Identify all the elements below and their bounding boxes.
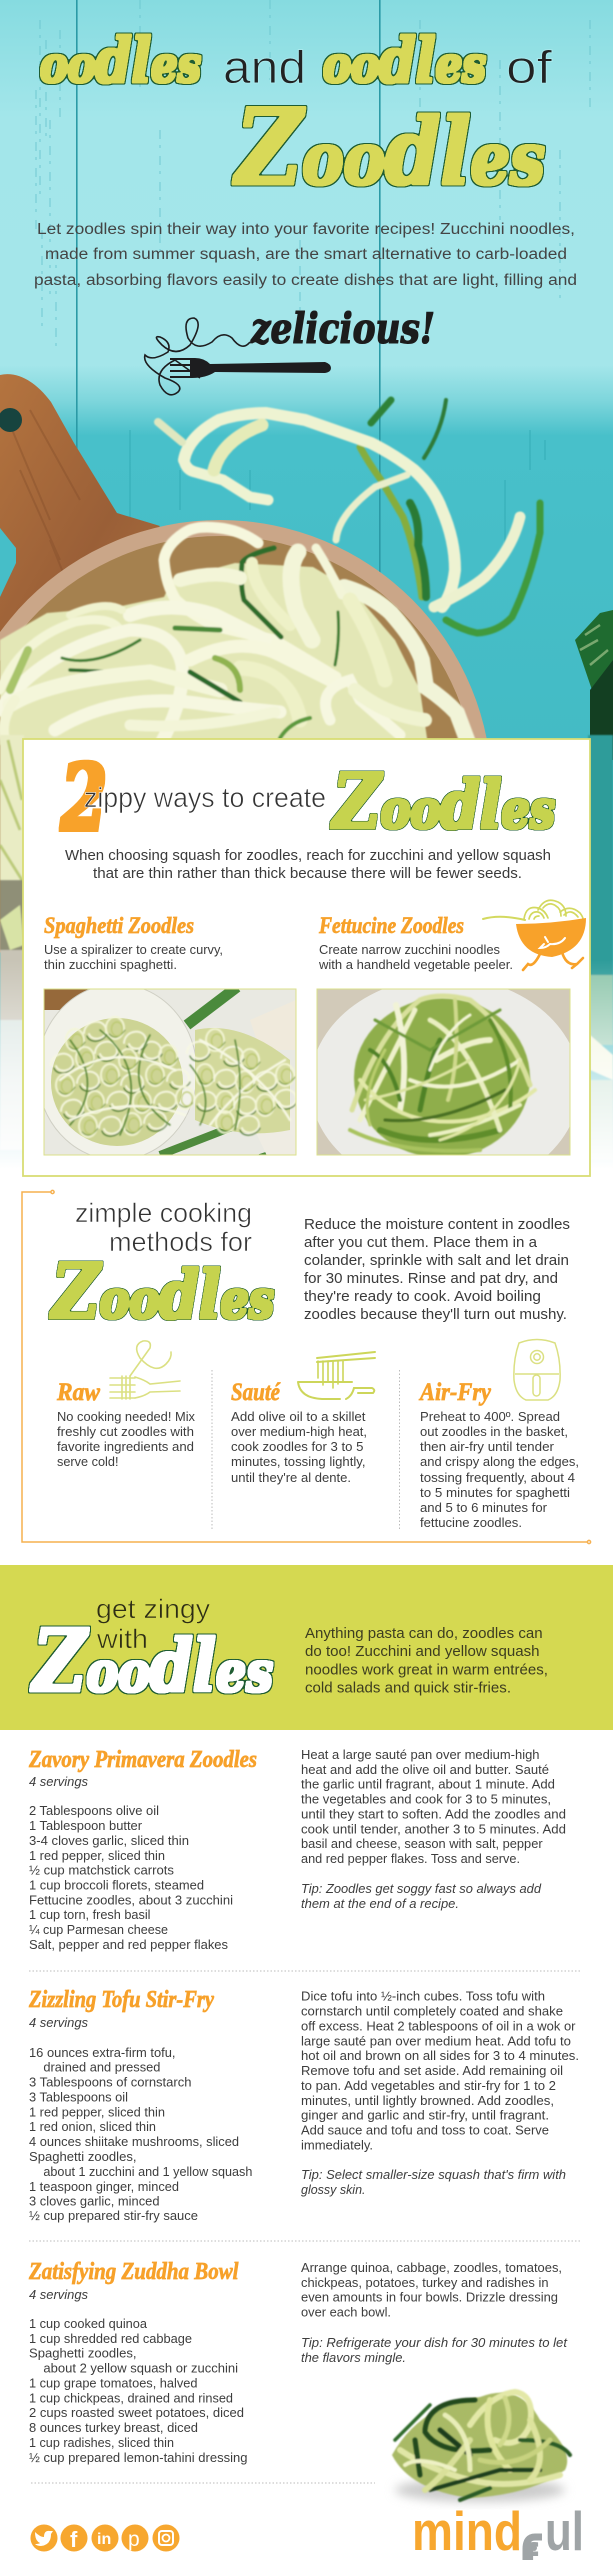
heading: get zingy with [96, 1594, 211, 1654]
ingredients: ½ cup prepared lemon-tahini dressing [29, 2450, 248, 2465]
tip: the flavors mingle. [301, 2350, 406, 2365]
ingredients: 3-4 cloves garlic, sliced thin [29, 1833, 189, 1848]
photo frame right [317, 989, 570, 1155]
moisture paragraph: Reduce the moisture content in zoodles [304, 1217, 570, 1233]
directions: the vegetables and cook for 3 to 5 minutes, [301, 1792, 551, 1807]
method: air-fry: tossing frequently, about 4 [420, 1470, 575, 1485]
ingredients: Spaghetti zoodles, [29, 2149, 136, 2164]
method: air-fry: to 5 minutes for spaghetti [420, 1485, 570, 1500]
icon: running noodle bowl mascot [483, 900, 586, 970]
band: get zingy with zoodles [0, 1565, 613, 1730]
noodles and cloth on the left edge [0, 735, 24, 1150]
heading: get zingy with: get zingy [96, 1594, 211, 1624]
ingredients: 1 red pepper, sliced thin [29, 1848, 165, 1863]
ingredients: 4 ounces shiitake mushrooms, sliced [29, 2134, 239, 2149]
directions: and red pepper flakes. Toss and serve. [301, 1851, 520, 1866]
directions: to pan. Add vegetables and stir-fry for 1 to 2 [301, 2078, 556, 2093]
spaghetti zoodles text: Spaghetti Zoodles [44, 913, 194, 938]
icon: facebook: f [70, 2527, 78, 2552]
method: saute [231, 1379, 367, 1485]
zoodles in the bowl [0, 527, 469, 745]
ingredients: ¼ cup Parmesan cheese [29, 1922, 168, 1937]
ingredients: about 1 zucchini and 1 yellow squash [43, 2164, 252, 2179]
photo: spaghetti zoodles in a bowl [44, 990, 296, 1154]
intro paragraph: Let zoodles spin their way into your favorite recipes! Zucchini noodles, [37, 221, 575, 238]
directions: large sauté pan over medium heat. Add tofu to [301, 2033, 571, 2048]
panel: zimple cooking methods [22, 1190, 591, 1544]
method: raw: serve cold! [57, 1454, 118, 1469]
title line one: of [506, 41, 552, 93]
method: air-fry: fettucine zoodles. [420, 1515, 522, 1530]
moisture paragraph: for 30 minutes. Rinse and pat dry, and [304, 1271, 558, 1287]
right edge background [588, 735, 613, 1160]
fettucine zoodles text [318, 913, 513, 972]
ingredients: about 2 yellow squash or zucchini [43, 2361, 238, 2376]
icon: pinterest [122, 2524, 148, 2552]
white fade at bottom of hero [0, 960, 613, 1180]
method: air-fry: and crispy along the edges, [420, 1454, 579, 1469]
icon: saute pan with chopsticks [298, 1352, 375, 1399]
tip: Tip: Zoodles get soggy fast so always add [301, 1881, 542, 1896]
method: air-fry: then air-fry until tender [420, 1439, 555, 1454]
ingredients: 1 cup chickpeas, drained and rinsed [29, 2390, 233, 2405]
directions [301, 1747, 566, 1866]
band paragraph: noodles work great in warm entrées, [305, 1662, 548, 1678]
fettucine zoodles text: Fettucine Zoodles [318, 913, 464, 938]
heading: get zingy with: with [96, 1624, 148, 1654]
ingredients: ½ cup prepared stir-fry sauce [29, 2208, 198, 2223]
tip: them at the end of a recipe. [301, 1896, 459, 1911]
title line two: Zoodles: Zoodles [233, 85, 545, 209]
tip: Tip: Refrigerate your dish for 30 minutes to let [301, 2335, 568, 2350]
method: raw: favorite ingredients and [57, 1439, 194, 1454]
spaghetti zoodles text: thin zucchini spaghetti. [44, 957, 177, 972]
directions: even amounts in four bowls. Drizzle dressing [301, 2290, 558, 2305]
panel intro text: When choosing squash for zoodles, reach for zucchini and yellow squash [65, 848, 551, 864]
moisture paragraph: they're ready to cook. Avoid boiling [304, 1289, 541, 1305]
directions [301, 1989, 579, 2152]
heading: zimple cooking methods for: zimple cooking [75, 1198, 252, 1228]
title line one [40, 24, 552, 97]
method: raw: Raw [56, 1379, 100, 1406]
wooden bowl [0, 520, 492, 1064]
ingredients: Fettucine zoodles, about 3 zucchini [29, 1892, 233, 1907]
moisture paragraph: zoodles because they'll turn out mushy. [304, 1307, 567, 1323]
moisture paragraph [304, 1217, 570, 1323]
band paragraph: cold salads and quick stir-fries. [305, 1680, 511, 1696]
heading: zimple cooking methods for: methods for [109, 1227, 252, 1257]
recipe title and servings [28, 2259, 239, 2302]
intro paragraph: made from summer squash, are the smart alternative to carb-loaded [45, 246, 567, 263]
method: air-fry: out zoodles in the basket, [420, 1424, 568, 1439]
directions: heat and add the olive oil and butter. Sauté [301, 1762, 549, 1777]
directions: Add sauce and tofu and toss to coat. Serve [301, 2122, 549, 2138]
recipe title and servings: Zizzling Tofu Stir-Fry [28, 1987, 214, 2013]
tip: Tip: Select smaller-size squash that's firm with [301, 2167, 566, 2182]
cutting board [0, 374, 160, 650]
directions: Dice tofu into ½-inch cubes. Toss tofu with [301, 1989, 545, 2004]
recipe title and servings: Zavory Primavera Zoodles [28, 1747, 257, 1773]
ingredients [29, 2316, 248, 2465]
panel: 2 zippy ways to create Zoodles [23, 739, 590, 1193]
ingredients: 1 cup shredded red cabbage [29, 2331, 192, 2346]
intro paragraph: pasta, absorbing flavors easily to create dishes that are light, filling and [34, 272, 577, 289]
panel intro text: that are thin rather than thick because there will be fewer seeds. [93, 866, 522, 882]
ingredients [29, 2045, 252, 2223]
heading: Zoodles white: Zoodles [30, 1611, 273, 1712]
directions [301, 2260, 562, 2320]
orange frame [22, 1190, 591, 1544]
ingredients: 8 ounces turkey breast, diced [29, 2420, 198, 2435]
method: saute: Sauté [231, 1379, 281, 1406]
directions: off excess. Heat 2 tablespoons of oil in a wok or [301, 2018, 576, 2033]
icon: air fryer [514, 1340, 560, 1400]
spaghetti zoodles text [44, 913, 223, 972]
tip [301, 2167, 566, 2197]
method: air-fry: Air-Fry [418, 1379, 492, 1406]
title line one: oodles [323, 24, 486, 97]
ingredients: 1 cup radishes, sliced thin [29, 2435, 174, 2450]
recipe title and servings: Zatisfying Zuddha Bowl [28, 2259, 239, 2285]
zelicious lettering with fork [145, 304, 435, 395]
directions: cook until tender, another 3 to 5 minutes. Add [301, 1821, 566, 1836]
ingredients: 1 teaspoon ginger, minced [29, 2179, 179, 2194]
recipe: zatisfying zuddha bowl [28, 2259, 568, 2465]
directions: the garlic until fragrant, about 1 minute. Add [301, 1777, 555, 1792]
method: air-fry: Preheat to 400º. Spread [420, 1409, 560, 1424]
ingredients: Spaghetti zoodles, [29, 2346, 136, 2361]
icon: fork with noodle squiggle [145, 318, 331, 395]
icon: pinterest: p [128, 2528, 140, 2551]
directions: until they start to soften. Add the zoodles and [301, 1806, 566, 1822]
icon: facebook [60, 2524, 88, 2552]
directions: chickpeas, potatoes, turkey and radishes in [301, 2275, 548, 2290]
ingredients: 3 Tablespoons of cornstarch [29, 2075, 192, 2090]
directions: cornstarch until completely coated and shake [301, 2004, 563, 2019]
ingredients: 3 cloves garlic, minced [29, 2194, 160, 2208]
ingredients: 2 cups roasted sweet potatoes, diced [29, 2405, 244, 2420]
ingredients: 1 red pepper, sliced thin [29, 2104, 165, 2119]
directions: Heat a large sauté pan over medium-high [301, 1747, 540, 1762]
ingredients [29, 1803, 233, 1952]
directions: over each bowl. [301, 2305, 391, 2320]
ingredients: drained and pressed [43, 2060, 160, 2075]
title line one: and [223, 41, 306, 93]
ingredients: 3 Tablespoons oil [29, 2090, 128, 2104]
wooden cutting board and bowl photo [0, 374, 613, 1160]
directions: Arrange quinoa, cabbage, zoodles, tomatoes, [301, 2260, 562, 2275]
title line one: oodles [40, 24, 201, 97]
band paragraph: do too! Zucchini and yellow squash [305, 1644, 540, 1660]
icon: fork with raw noodle [110, 1341, 180, 1399]
loose zucchini strands on table [158, 400, 540, 633]
photo: fettucine zoodles on a plate [318, 990, 570, 1154]
icon: linkedin [92, 2524, 118, 2552]
recipe title and servings: 4 servings [29, 2287, 88, 2302]
fettucine zoodles text: with a handheld vegetable peeler. [318, 957, 513, 972]
tip [301, 1881, 542, 1911]
tip [301, 2335, 568, 2365]
ingredients: 2 Tablespoons olive oil [29, 1803, 159, 1818]
directions: Remove tofu and set aside. Add remaining oil [301, 2063, 563, 2078]
heading: zippy ways to create: zippy ways to create [84, 782, 326, 813]
hero background: teal wood planks [0, 0, 613, 1178]
ingredients: Salt, pepper and red pepper flakes [29, 1937, 228, 1952]
directions: hot oil and brown on all sides for 3 to 4 minutes. [301, 2048, 579, 2063]
tip: glossy skin. [301, 2182, 366, 2197]
method: saute: Add olive oil to a skillet [231, 1409, 366, 1424]
icon: instagram [152, 2524, 180, 2552]
recipe title and servings [28, 1747, 257, 1789]
zelicious lettering with fork: zelicious! [250, 304, 435, 353]
icon: twitter [30, 2524, 58, 2552]
heading: Zoodles: Zoodles [330, 757, 555, 846]
recipe title and servings: 4 servings [29, 1774, 88, 1789]
method: saute: until they're al dente. [231, 1470, 351, 1485]
intro paragraph [34, 221, 577, 289]
recipe title and servings: 4 servings [29, 2015, 88, 2030]
method: raw: No cooking needed! Mix [57, 1409, 195, 1424]
method: air-fry [418, 1379, 579, 1530]
ingredients: 1 cup torn, fresh basil [29, 1907, 151, 1922]
ingredients: 1 cup broccoli florets, steamed [29, 1878, 204, 1892]
recipe: zizzling tofu stir-fry [28, 1987, 579, 2223]
method: raw: freshly cut zoodles with [57, 1424, 194, 1439]
method: saute: over medium-high heat, [231, 1424, 367, 1439]
recipe title and servings [28, 1987, 214, 2030]
directions: ginger and garlic and stir-fry, until fragrant. [301, 2108, 549, 2123]
panel intro text [65, 848, 551, 882]
title: oodles and oodles of Zoodles [40, 24, 552, 209]
moisture paragraph: after you cut them. Place them in a [304, 1235, 538, 1251]
ingredients: ½ cup matchstick carrots [29, 1863, 174, 1878]
ingredients: 1 red onion, sliced thin [29, 2119, 156, 2134]
zucchini at right [575, 610, 613, 740]
spaghetti zoodles text: Use a spiralizer to create curvy, [44, 942, 223, 957]
fettucine zoodles text: Create narrow zucchini noodles [319, 942, 500, 957]
band paragraph: Anything pasta can do, zoodles can [305, 1626, 543, 1642]
icon: linkedin: in [97, 2531, 111, 2548]
directions: basil and cheese, season with salt, pepper [301, 1836, 543, 1851]
directions: immediately. [301, 2137, 373, 2152]
big orange numeral 2: 2 [60, 744, 107, 852]
moisture paragraph: colander, sprinkle with salt and let drain [304, 1253, 569, 1269]
band paragraph [305, 1626, 548, 1696]
ingredients: 16 ounces extra-firm tofu, [29, 2045, 176, 2060]
ingredients: 1 cup cooked quinoa [29, 2316, 148, 2331]
method: saute: minutes, tossing lightly, [231, 1454, 366, 1469]
photo frame left [44, 989, 296, 1155]
photo: pile of zucchini noodles [392, 2392, 570, 2502]
method: raw [56, 1379, 195, 1469]
social media icons [30, 2524, 180, 2552]
directions: minutes, until lightly browned. Add zoodles, [301, 2093, 554, 2108]
ingredients: 1 Tablespoon butter [29, 1818, 143, 1833]
heading: Zoodles: Zoodles [49, 1247, 274, 1336]
method: saute: cook zoodles for 3 to 5 [231, 1439, 364, 1454]
heading: zimple cooking methods for [75, 1198, 252, 1257]
method: air-fry: and 5 to 6 minutes for [420, 1500, 548, 1515]
ingredients: 1 cup grape tomatoes, halved [29, 2376, 198, 2390]
recipe: zavory primavera zoodles [28, 1747, 566, 1952]
